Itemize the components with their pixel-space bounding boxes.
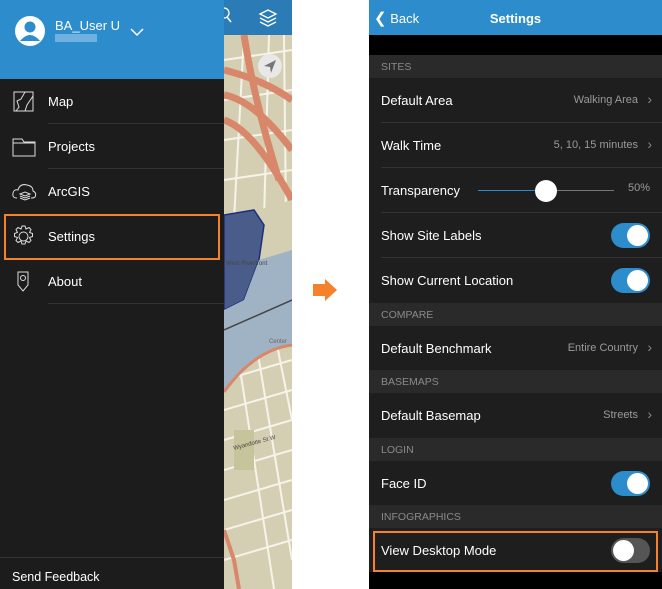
callout: view desktop mode highlight <box>373 531 658 572</box>
panel: right phone settings: › <box>647 339 652 355</box>
panel: right phone settings: › <box>647 91 652 107</box>
section: login: LOGIN <box>381 444 414 456</box>
section: basemaps <box>369 370 662 393</box>
section: basemaps: BASEMAPS <box>381 376 439 388</box>
nav bar <box>369 0 662 35</box>
map strip: West Riverfront <box>226 261 268 267</box>
menu: Map <box>14 92 224 124</box>
panel: right phone settings: › <box>647 136 652 152</box>
header: user profile <box>0 0 224 79</box>
panel: right phone settings: Default Area <box>381 93 453 108</box>
arrow <box>313 279 337 301</box>
section: sites <box>369 55 662 78</box>
menu: ArcGIS <box>12 184 90 200</box>
icon: chevron down <box>130 28 144 36</box>
menu: About <box>18 272 224 304</box>
panel: right phone settings: › <box>647 406 652 422</box>
panel: right phone settings: 5, 10, 15 minutes <box>554 139 638 151</box>
menu: Map: Map <box>48 94 73 109</box>
map strip: Wyandotte St W <box>233 435 277 452</box>
text: send feedback: Send Feedback <box>12 570 100 584</box>
panel: right phone settings: Default Benchmark <box>381 341 492 356</box>
menu: Projects: Projects <box>48 139 95 154</box>
menu: Projects <box>12 138 224 169</box>
menu: Settings (highlighted): Settings <box>48 229 95 244</box>
panel: right phone settings: Default Basemap <box>381 408 481 423</box>
menu: About: About <box>48 274 82 289</box>
panel: left phone drawer <box>0 0 292 589</box>
section: login <box>369 438 662 461</box>
section: infographics <box>369 505 662 528</box>
transparency slider: Transparency <box>381 183 460 198</box>
callout: settings highlight box <box>4 214 220 260</box>
section: compare: COMPARE <box>381 309 433 321</box>
section: compare <box>369 303 662 326</box>
transparency slider <box>369 168 662 213</box>
section: infographics: INFOGRAPHICS <box>381 511 461 523</box>
panel: right phone settings: Show Current Location <box>381 273 513 288</box>
panel: right phone settings: View Desktop Mode <box>381 543 496 558</box>
panel: right phone settings <box>369 0 662 589</box>
panel: right phone settings: Show Site Labels <box>381 228 481 243</box>
transparency slider: 50% <box>628 182 650 194</box>
menu: Settings (highlighted) <box>14 226 95 244</box>
panel: right phone settings: Entire Country <box>568 342 638 354</box>
map strip <box>224 0 292 589</box>
section: sites: SITES <box>381 61 411 73</box>
nav bar: Settings <box>490 11 541 26</box>
menu: ArcGIS: ArcGIS <box>48 184 90 199</box>
map strip: Center <box>269 339 287 345</box>
icon: avatar <box>15 16 45 46</box>
panel: right phone settings: Walking Area <box>574 94 638 106</box>
panel: right phone settings: Streets <box>603 409 638 421</box>
nav bar: ❮ Back <box>374 10 419 27</box>
user name: BA_User U <box>55 18 120 33</box>
panel: right phone settings: Walk Time <box>381 138 441 153</box>
panel: right phone settings: Face ID <box>381 476 427 491</box>
